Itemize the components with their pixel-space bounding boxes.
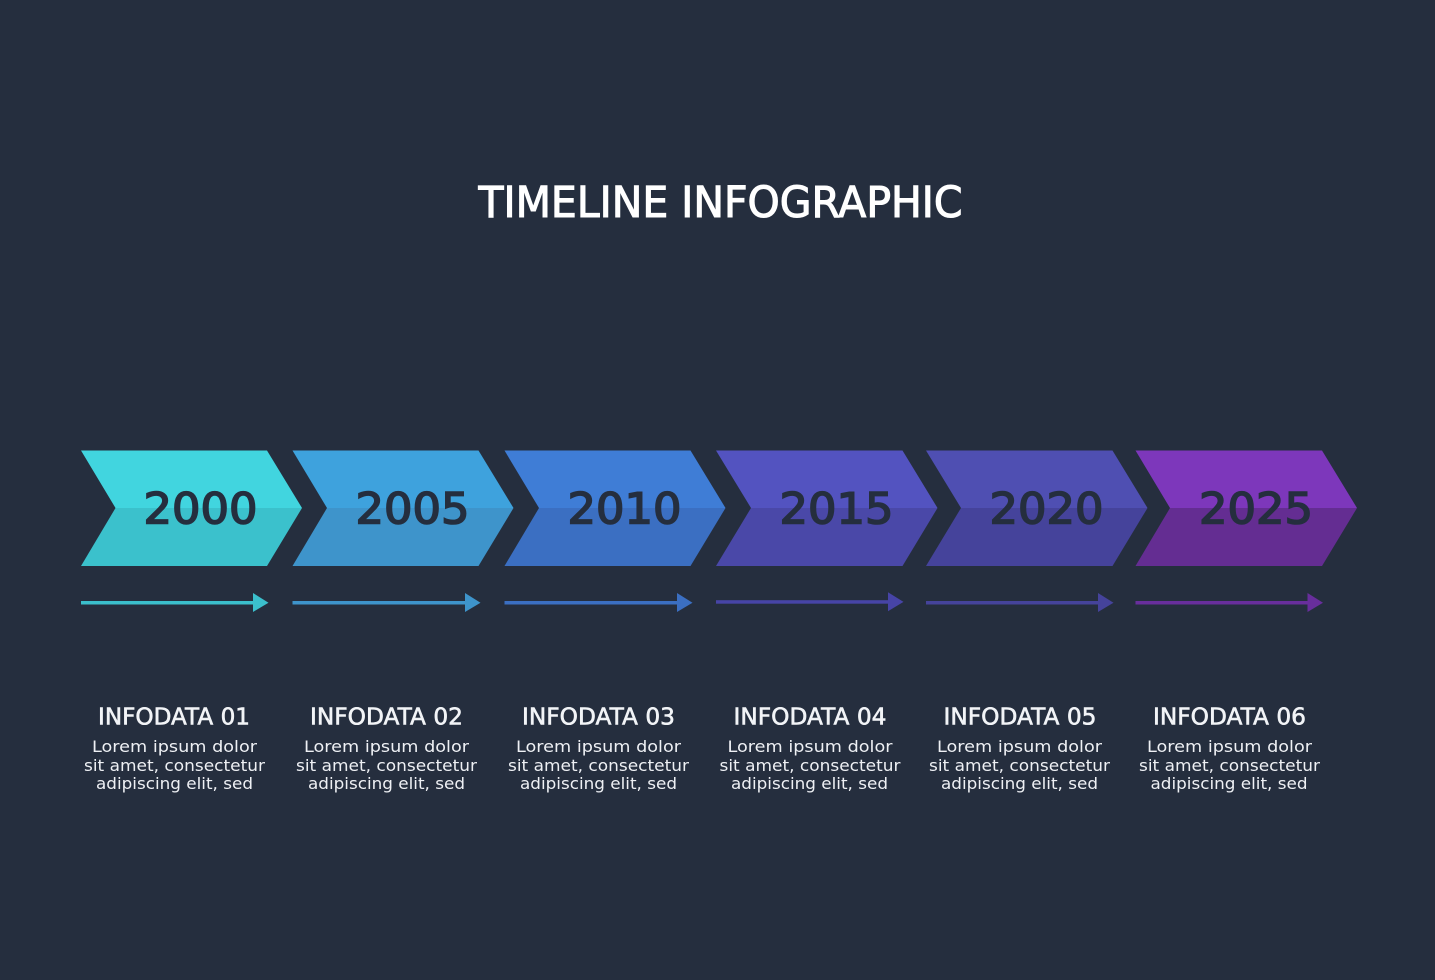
chevron 2025	[1136, 450, 1357, 566]
description 6: adipiscing elit, sed	[1150, 774, 1308, 793]
title: TIMELINE INFOGRAPHIC	[478, 178, 962, 228]
description 6: Lorem ipsum dolor	[1147, 737, 1312, 756]
description 5	[929, 737, 1110, 793]
description 4: Lorem ipsum dolor	[728, 737, 893, 756]
description 2: sit amet, consectetur	[296, 756, 477, 775]
year 2025: 2025	[1199, 484, 1313, 534]
description 4	[720, 737, 901, 793]
year 2005: 2005	[356, 484, 470, 534]
step: 2000	[81, 450, 302, 793]
description 6: sit amet, consectetur	[1139, 756, 1320, 775]
description 3: sit amet, consectetur	[508, 756, 689, 775]
year 2000: 2000	[144, 484, 258, 534]
description 2: Lorem ipsum dolor	[304, 737, 469, 756]
step: 2020	[926, 450, 1148, 793]
arrow 1	[81, 593, 268, 612]
description 2	[296, 737, 477, 793]
year 2015: 2015	[780, 484, 894, 534]
chevron 2005	[292, 450, 514, 566]
description 5: Lorem ipsum dolor	[937, 737, 1102, 756]
label: infodata 03: INFODATA 03	[522, 704, 675, 730]
description 1	[84, 737, 265, 793]
description 5: sit amet, consectetur	[929, 756, 1110, 775]
description 1: sit amet, consectetur	[84, 756, 265, 775]
description 3: adipiscing elit, sed	[520, 774, 677, 793]
step: 2005	[292, 450, 514, 793]
description 1: adipiscing elit, sed	[96, 774, 253, 793]
description 3	[508, 737, 689, 793]
description 5: adipiscing elit, sed	[941, 774, 1098, 793]
arrow 2	[292, 593, 480, 612]
year 2010: 2010	[568, 484, 682, 534]
arrow 4	[716, 592, 904, 611]
chevron 2020	[926, 450, 1148, 566]
year 2020: 2020	[990, 484, 1104, 534]
description 4: adipiscing elit, sed	[731, 774, 888, 793]
description 3: Lorem ipsum dolor	[516, 737, 681, 756]
label: infodata 06: INFODATA 06	[1153, 704, 1306, 730]
arrow 5	[926, 593, 1114, 612]
description 2: adipiscing elit, sed	[308, 774, 465, 793]
description 4: sit amet, consectetur	[720, 756, 901, 775]
arrow 6	[1136, 593, 1323, 612]
chevron 2000	[81, 450, 302, 566]
label: infodata 02: INFODATA 02	[310, 704, 463, 730]
step: 2010	[504, 450, 726, 793]
label: infodata 05: INFODATA 05	[944, 704, 1096, 730]
chevron 2015	[716, 450, 938, 566]
step: 2015	[716, 450, 938, 793]
arrow 3	[504, 593, 692, 612]
step: 2025	[1136, 450, 1357, 793]
chevron 2010	[504, 450, 726, 566]
label: infodata 04: INFODATA 04	[734, 704, 886, 730]
description 1: Lorem ipsum dolor	[92, 737, 257, 756]
description 6	[1139, 737, 1320, 793]
label: infodata 01: INFODATA 01	[98, 704, 250, 730]
